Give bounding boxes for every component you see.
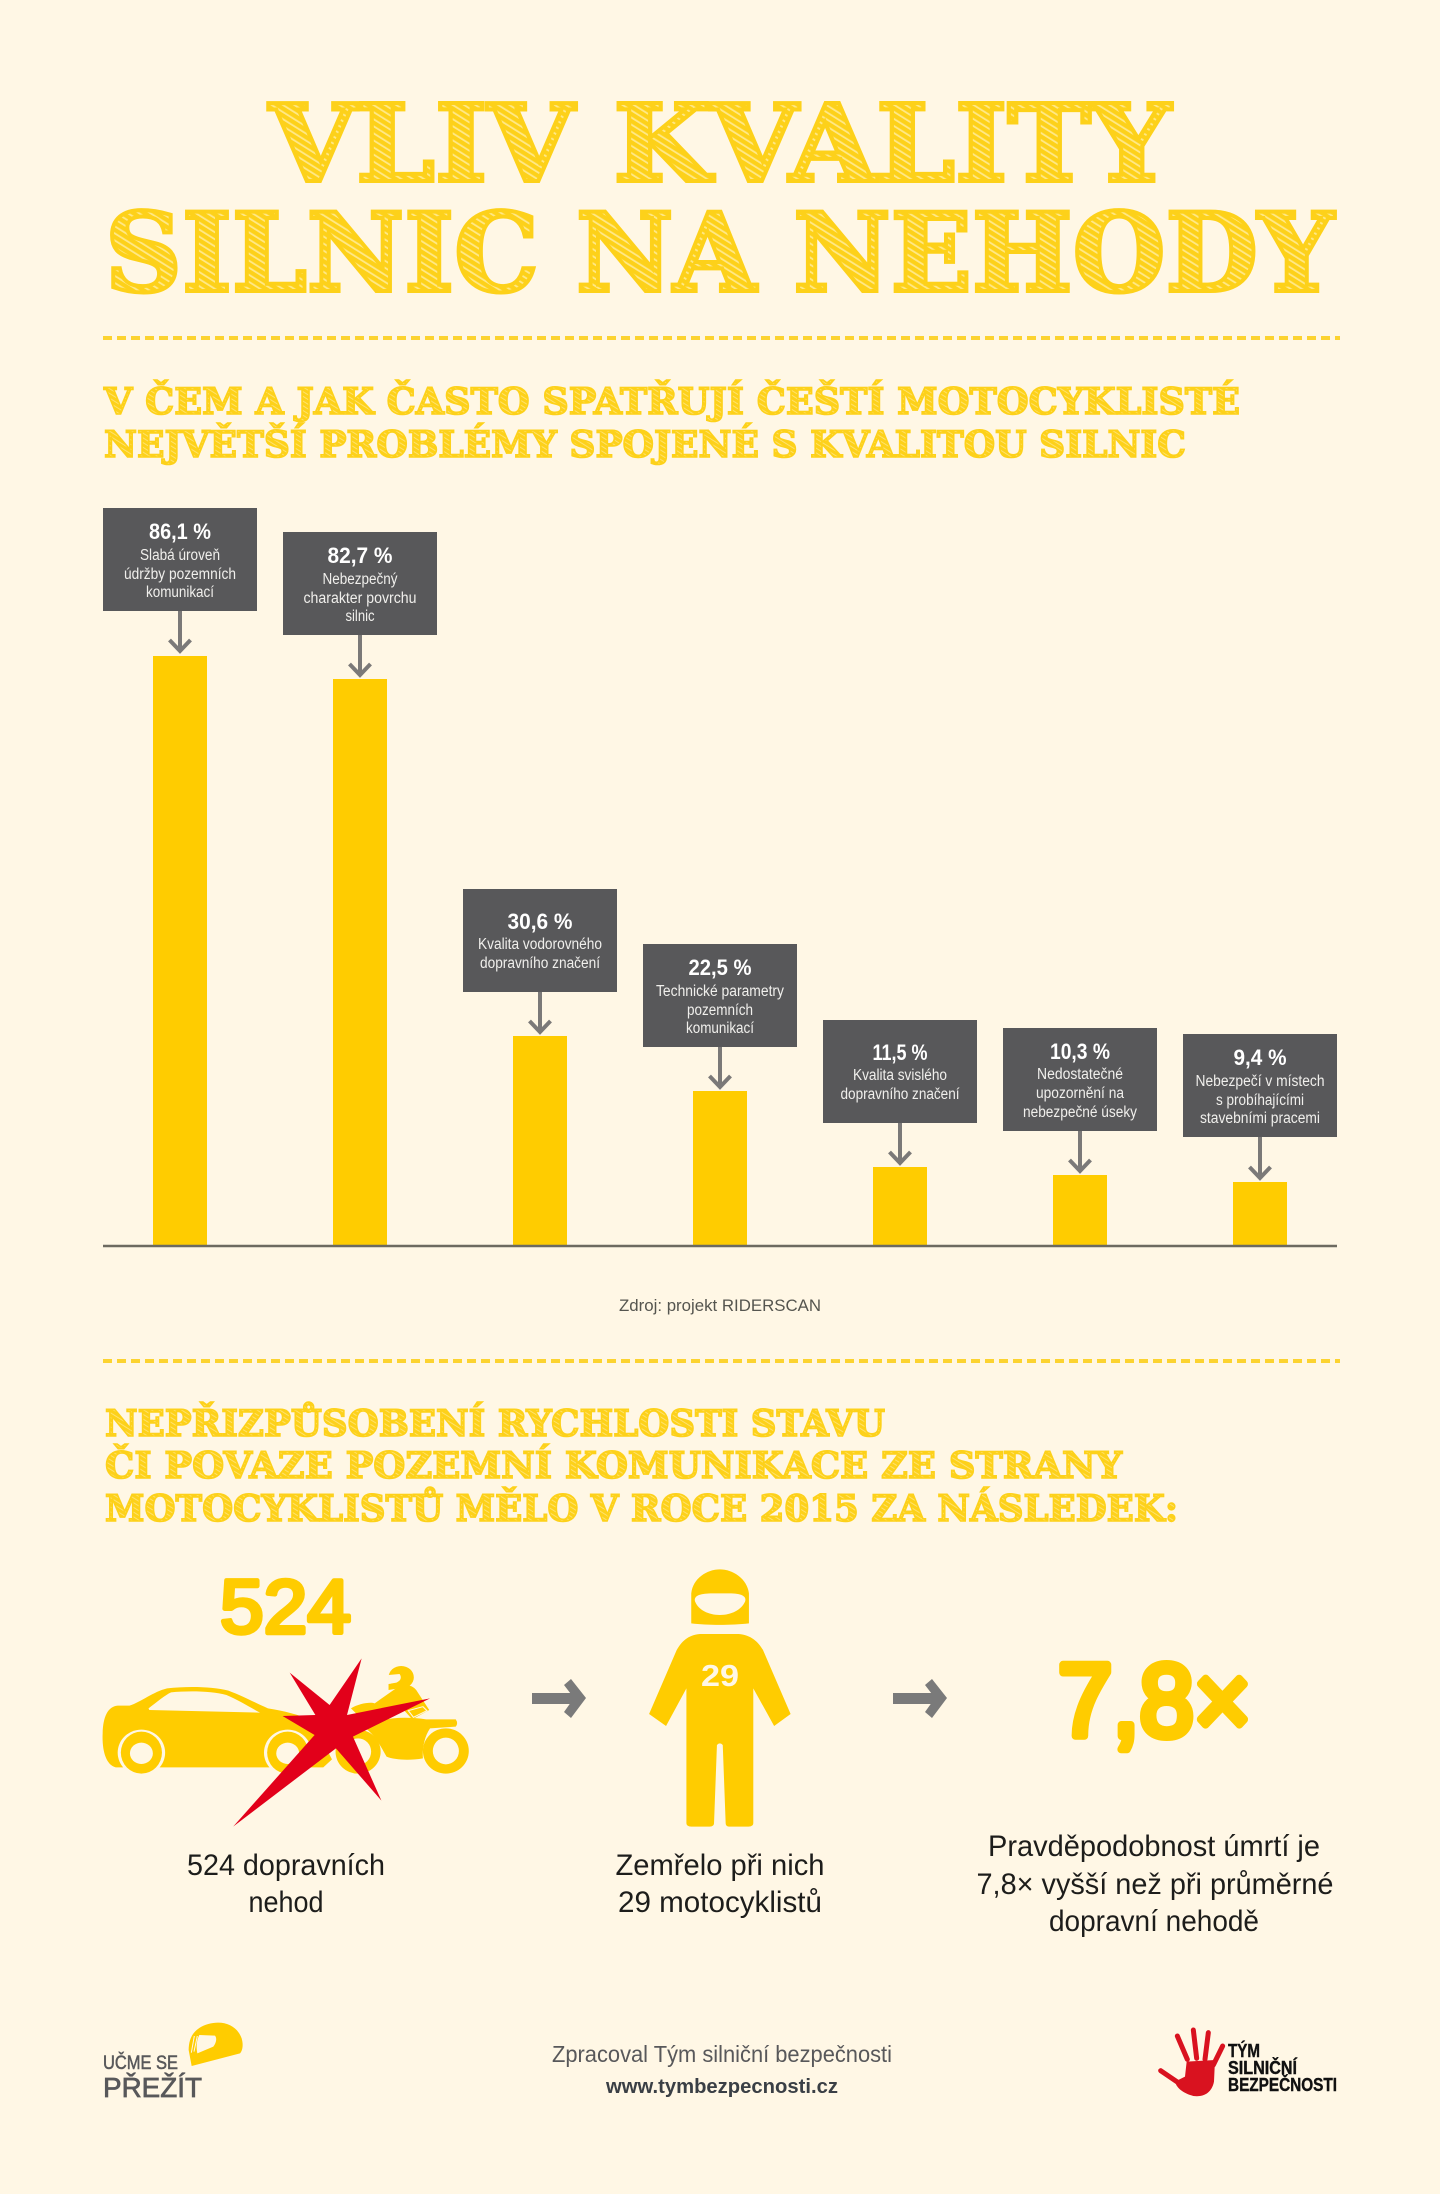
bar 4: 22,5 % bbox=[643, 944, 797, 1246]
source note: Zdroj: projekt RIDERSCAN bbox=[619, 1296, 821, 1315]
bar 2: 82,7 %: Nebezpečný bbox=[322, 571, 398, 588]
caption: deaths: 29 motocyklistů bbox=[618, 1886, 822, 1919]
caption: crashes: nehod bbox=[248, 1886, 324, 1919]
bar 7: 9,4 %: stavebními pracemi bbox=[1200, 1110, 1320, 1127]
bar 1: 86,1 %: Slabá úroveň bbox=[140, 547, 220, 564]
bar 6: 10,3 %: upozornění na bbox=[1036, 1085, 1124, 1102]
caption: deaths bbox=[616, 1849, 824, 1919]
icon: red hand bbox=[1161, 2030, 1223, 2096]
bar 2: 82,7 %: 82,7 % bbox=[328, 543, 392, 568]
bar 1: 86,1 %: údržby pozemních bbox=[124, 566, 236, 583]
bar 6: 10,3 %: Nedostatečné bbox=[1037, 1066, 1123, 1083]
bar 5: 11,5 %: dopravního značení bbox=[840, 1086, 960, 1103]
footer credit: Zpracoval Tým silniční bezpečnosti bbox=[552, 2041, 892, 2067]
title bbox=[105, 82, 1335, 317]
bar chart bbox=[103, 508, 1337, 1246]
caption: crashes: 524 dopravních bbox=[187, 1849, 385, 1882]
bar 4: 22,5 %: komunikací bbox=[686, 1020, 755, 1037]
heading: problems: NEJVĚTŠÍ PROBLÉMY SPOJENÉ S KVALITOU SILNIC bbox=[104, 424, 1186, 466]
icon: motorcyclist figure bbox=[649, 1569, 791, 1827]
bar 4: 22,5 %: Technické parametry bbox=[656, 983, 784, 1000]
icon: motorcyclist figure: 29 bbox=[701, 1658, 739, 1693]
caption: crashes bbox=[187, 1849, 385, 1919]
bar 1: 86,1 % bbox=[103, 508, 257, 1246]
logo: Tým silniční bezpečnosti: BEZPEČNOSTI bbox=[1228, 2074, 1337, 2095]
heading: consequences bbox=[105, 1403, 1178, 1530]
bar 4: 22,5 %: pozemních bbox=[687, 1002, 753, 1019]
logo: Tým silniční bezpečnosti: SILNIČNÍ bbox=[1228, 2057, 1298, 2078]
bar 7: 9,4 %: 9,4 % bbox=[1234, 1045, 1286, 1070]
bar 7: 9,4 % bbox=[1183, 1034, 1337, 1246]
bar 6: 10,3 %: 10,3 % bbox=[1050, 1039, 1110, 1064]
caption: probability: dopravní nehodě bbox=[1049, 1905, 1259, 1938]
icon: car and motorcycle crash bbox=[103, 1658, 469, 1827]
heading: consequences: ČI POVAZE POZEMNÍ KOMUNIKACE ZE STRANY bbox=[105, 1445, 1123, 1487]
footer credit bbox=[552, 2041, 892, 2098]
bar 1: 86,1 %: komunikací bbox=[146, 584, 215, 601]
bar 4: 22,5 %: 22,5 % bbox=[688, 955, 752, 980]
bar 3: 30,6 %: Kvalita vodorovného bbox=[478, 936, 602, 953]
title: VLIV KVALITY bbox=[268, 82, 1173, 207]
bar 2: 82,7 %: silnic bbox=[346, 608, 375, 625]
logo: Učme se přežít: PŘEŽÍT bbox=[103, 2072, 202, 2103]
heading: problems bbox=[103, 381, 1240, 466]
icon: red star burst bbox=[233, 1658, 430, 1827]
logo: Učme se přežít: UČME SE bbox=[103, 2052, 178, 2074]
bar 3: 30,6 % bbox=[463, 889, 617, 1246]
heading: consequences: NEPŘIZPŮSOBENÍ RYCHLOSTI STAVU bbox=[105, 1403, 885, 1445]
bar 3: 30,6 %: dopravního značení bbox=[480, 955, 601, 972]
caption: deaths: Zemřelo při nich bbox=[616, 1849, 824, 1882]
number: 524: 524 bbox=[220, 1565, 351, 1650]
arrow 1 bbox=[532, 1679, 586, 1718]
bar 6: 10,3 % bbox=[1003, 1028, 1157, 1246]
bar 6: 10,3 %: nebezpečné úseky bbox=[1023, 1104, 1137, 1121]
title: SILNIC NA NEHODY bbox=[105, 189, 1335, 317]
caption: probability: Pravděpodobnost úmrtí je bbox=[988, 1830, 1320, 1863]
logo: Tým silniční bezpečnosti: TÝM bbox=[1228, 2040, 1260, 2061]
number: 7,8×: 7,8× bbox=[1058, 1643, 1251, 1758]
heading: problems: V ČEM A JAK ČASTO SPATŘUJÍ ČEŠTÍ MOTOCYKLISTÉ bbox=[103, 381, 1240, 423]
icon: motorcycle bbox=[336, 1666, 469, 1774]
logo: Učme se přežít bbox=[103, 2023, 243, 2103]
bar 3: 30,6 %: 30,6 % bbox=[508, 909, 572, 934]
arrow 2 bbox=[893, 1679, 947, 1718]
bar 7: 9,4 %: s probíhajícími bbox=[1216, 1092, 1304, 1109]
icon: helmet bbox=[189, 2023, 243, 2066]
caption: probability: 7,8× vyšší než při průměrné bbox=[976, 1868, 1334, 1901]
bar 5: 11,5 %: Kvalita svislého bbox=[853, 1067, 947, 1084]
bar 5: 11,5 %: 11,5 % bbox=[872, 1040, 928, 1065]
bar 7: 9,4 %: Nebezpečí v místech bbox=[1196, 1073, 1324, 1090]
bar 2: 82,7 %: charakter povrchu bbox=[304, 590, 416, 607]
bar 1: 86,1 %: 86,1 % bbox=[149, 519, 211, 544]
icon: car bbox=[103, 1687, 332, 1776]
heading: consequences: MOTOCYKLISTŮ MĚLO V ROCE 2015 ZA NÁSLEDEK: bbox=[105, 1488, 1178, 1530]
bar 5: 11,5 % bbox=[823, 1020, 977, 1246]
caption: probability bbox=[976, 1830, 1334, 1938]
logo: Tým silniční bezpečnosti bbox=[1161, 2030, 1337, 2096]
bar 2: 82,7 % bbox=[283, 532, 437, 1246]
footer credit: www.tymbezpecnosti.cz bbox=[605, 2076, 838, 2098]
